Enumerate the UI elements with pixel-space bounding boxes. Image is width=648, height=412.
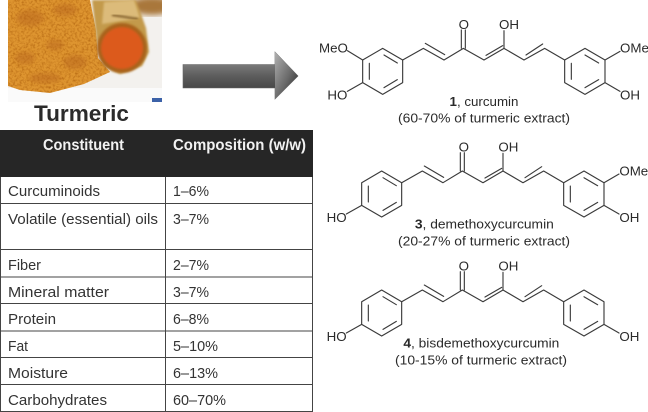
structure 4: bisdemethoxycurcumin: OH	[619, 329, 639, 344]
structure 1: curcumin: 1, curcumin	[450, 94, 518, 109]
structure 1: curcumin	[319, 17, 648, 126]
row: Volatile oils: 3–7%	[173, 211, 209, 228]
structure 1: curcumin: O	[459, 17, 469, 32]
row: Volatile oils: Volatile (essential) oils	[8, 211, 158, 228]
row: Carbohydrates	[8, 392, 226, 409]
structure 3: demethoxycurcumin	[327, 140, 648, 248]
structure 3: demethoxycurcumin: 3, demethoxycurcumin	[415, 217, 554, 232]
structure 3: demethoxycurcumin: (20-27% of turmeric extract)	[398, 233, 570, 248]
structure 3: demethoxycurcumin: OH	[498, 140, 518, 155]
row: Fiber: 2–7%	[173, 257, 209, 274]
structure 4: bisdemethoxycurcumin: O	[459, 259, 469, 274]
structure 3: demethoxycurcumin: OH	[619, 210, 639, 225]
row: Mineral matter: Mineral matter	[8, 284, 109, 301]
row: Fat: 5–10%	[173, 338, 218, 355]
row: Carbohydrates: Carbohydrates	[8, 392, 107, 409]
row: Fat: Fat	[8, 338, 29, 355]
row: Protein: 6–8%	[173, 311, 209, 328]
table: constituents and composition	[0, 130, 313, 412]
row: Curcuminoids: Curcuminoids	[8, 183, 100, 200]
row: Protein: Protein	[8, 311, 56, 328]
structure 4: bisdemethoxycurcumin: 4, bisdemethoxycurcumin	[403, 336, 559, 351]
structure 1: curcumin: (60-70% of turmeric extract)	[398, 111, 570, 126]
structure 3: demethoxycurcumin: HO	[327, 210, 347, 225]
structure 4: bisdemethoxycurcumin: OH	[498, 259, 518, 274]
structure 3: demethoxycurcumin: OMe	[619, 163, 648, 178]
row: Curcuminoids: 1–6%	[173, 183, 209, 200]
structure 1: curcumin: MeO	[319, 41, 348, 56]
row: Moisture	[8, 365, 218, 382]
row: Fiber: Fiber	[8, 257, 41, 274]
row: Fiber	[8, 257, 209, 274]
table header	[0, 130, 313, 177]
arrow	[183, 52, 298, 99]
row: Moisture: 6–13%	[173, 365, 218, 382]
table header: Constituent	[43, 137, 124, 154]
row: Curcuminoids	[8, 183, 209, 200]
structure 1: curcumin: OH	[620, 87, 640, 102]
row: Carbohydrates: 60–70%	[173, 392, 226, 409]
row: Mineral matter	[8, 284, 209, 301]
structure 4: bisdemethoxycurcumin: (10-15% of turmeric extract)	[395, 352, 567, 367]
structure 3: demethoxycurcumin: O	[459, 140, 469, 155]
row: Moisture: Moisture	[8, 365, 68, 382]
table header: Composition (w/w)	[173, 137, 306, 154]
row: Fat	[8, 338, 218, 355]
heading: Turmeric: Turmeric	[34, 101, 129, 126]
structure 4: bisdemethoxycurcumin	[327, 259, 639, 367]
structure 1: curcumin: OH	[499, 17, 519, 32]
row: Protein	[8, 311, 209, 328]
table grid	[0, 177, 313, 412]
row: Mineral matter: 3–7%	[173, 284, 209, 301]
structure 1: curcumin: HO	[327, 87, 347, 102]
structure 4: bisdemethoxycurcumin: HO	[327, 329, 347, 344]
photo: turmeric powder and root	[8, 0, 174, 102]
